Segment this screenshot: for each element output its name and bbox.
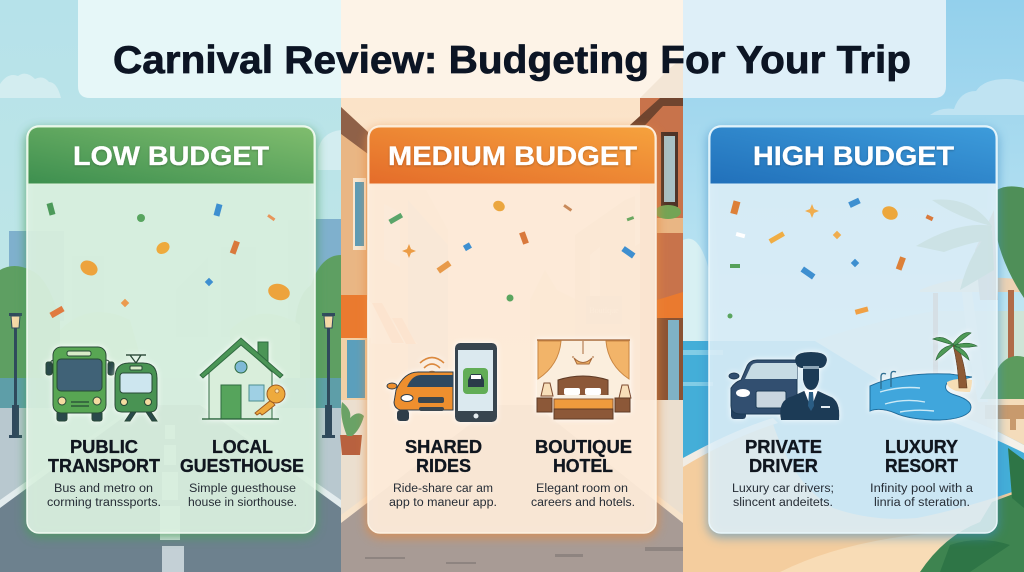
label: boutique hotel: HOTEL — [553, 455, 613, 476]
label: shared rides: RIDES — [416, 455, 471, 476]
label: public transport: TRANSPORT — [48, 455, 161, 476]
header: low budget — [28, 127, 314, 184]
streetlamp left — [9, 313, 22, 438]
header: low budget: LOW BUDGET — [73, 141, 269, 171]
title banner — [78, 0, 946, 98]
header: high budget: HIGH BUDGET — [753, 141, 954, 171]
label: private driver: Luxury car drivers; — [732, 483, 834, 495]
icon: house and key — [200, 338, 285, 419]
label: public transport — [47, 436, 161, 509]
label: private driver: slincent andeitets. — [733, 497, 833, 509]
label: private driver: PRIVATE — [745, 436, 822, 457]
confetti: medium budget — [388, 199, 635, 302]
label: luxury resort: RESORT — [885, 455, 959, 476]
label: boutique hotel: BOUTIQUE — [535, 436, 632, 457]
label: boutique hotel: Elegant room on — [536, 483, 628, 495]
label: local guesthouse — [180, 436, 304, 509]
background scene: town street — [340, 98, 705, 572]
label: luxury resort: Infinity pool with a — [870, 483, 974, 495]
label: public transport: corming transsports. — [47, 497, 161, 509]
label: shared rides: app to maneur app. — [389, 497, 497, 509]
background scene: town street: Boutique — [589, 306, 619, 315]
background scene: city street — [0, 0, 341, 572]
label: local guesthouse: LOCAL — [212, 436, 273, 457]
panel: low budget — [25, 126, 317, 538]
label: boutique hotel: careers and hotels. — [531, 497, 635, 509]
label: local guesthouse: Simple guesthouse — [189, 483, 296, 495]
label: public transport: Bus and metro on — [54, 483, 153, 495]
label: boutique hotel — [531, 436, 635, 509]
label: shared rides — [389, 436, 497, 509]
label: local guesthouse: GUESTHOUSE — [180, 455, 304, 476]
title: Carnival Review: Budgeting For Your Trip — [113, 39, 911, 82]
label: luxury resort: linria of steration. — [874, 497, 970, 509]
background scene: beach — [683, 0, 1024, 572]
label: local guesthouse: house in siorthouse. — [188, 497, 297, 509]
header: high budget — [710, 127, 996, 184]
label: public transport: PUBLIC — [70, 436, 138, 457]
label: shared rides: SHARED — [405, 436, 482, 457]
label: luxury resort: LUXURY — [885, 436, 959, 457]
icon: bus — [46, 347, 114, 421]
streetlamp right — [322, 313, 335, 438]
icon: luxury resort pool — [870, 332, 977, 420]
label: luxury resort — [870, 436, 974, 509]
header: medium budget: MEDIUM BUDGET — [388, 141, 637, 171]
label: private driver: DRIVER — [749, 455, 818, 476]
panel: high budget — [707, 126, 999, 538]
confetti: low budget — [47, 202, 292, 318]
icon: private driver — [729, 352, 839, 420]
icon: boutique hotel room — [537, 340, 631, 419]
icon: shared ride car and phone — [387, 343, 497, 422]
panel: medium budget — [366, 126, 658, 538]
icon: tram — [115, 355, 157, 421]
header: medium budget — [369, 127, 655, 184]
label: shared rides: Ride-share car am — [393, 483, 493, 495]
confetti: high budget — [728, 198, 934, 318]
label: private driver — [732, 436, 834, 509]
